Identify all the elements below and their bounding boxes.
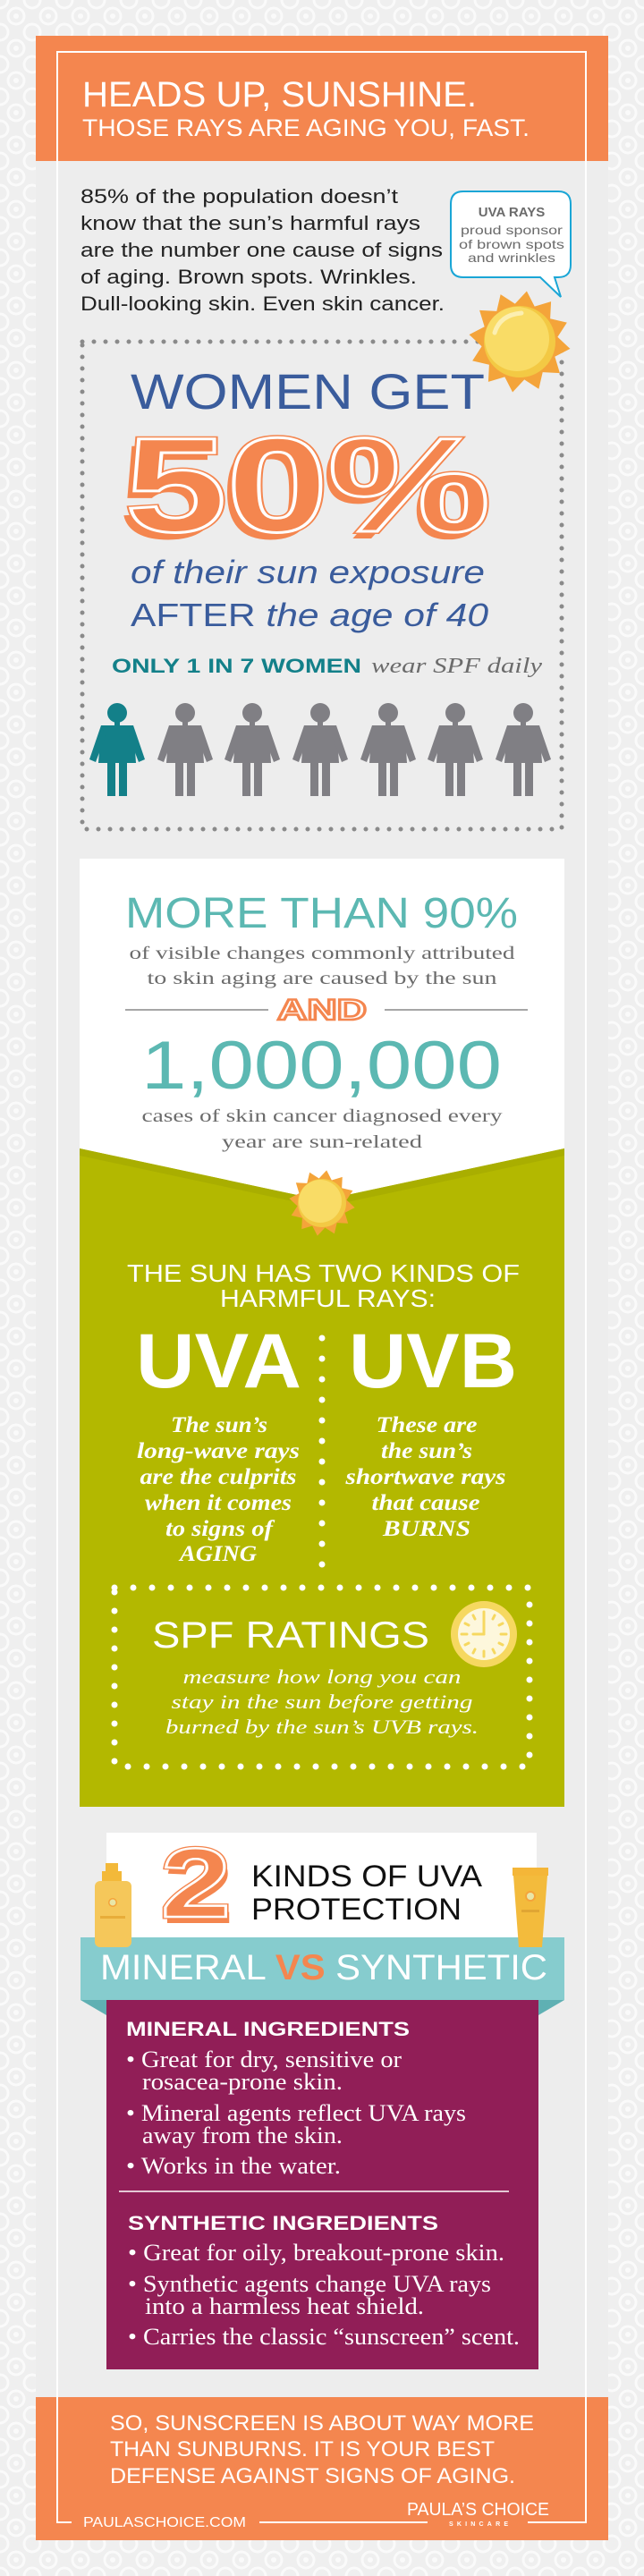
dotted divider <box>318 1338 326 1565</box>
teal ribbon: MINERAL VS SYNTHETIC <box>100 1948 547 1987</box>
icon row: women figures <box>89 703 551 796</box>
big number 50%: 50% <box>125 410 490 560</box>
mineral ingredients: rosacea-prone skin. <box>142 2069 343 2095</box>
callout: UVA rays bubble: proud sponsor <box>461 223 563 237</box>
synthetic ingredients: SYNTHETIC INGREDIENTS <box>128 2212 438 2234</box>
icon: sunscreen bottle <box>95 1863 131 1947</box>
intro text: Dull-looking skin. Even skin cancer. <box>80 292 445 315</box>
big number 2: 2 <box>161 1828 231 1938</box>
UVA column: are the culprits <box>140 1465 297 1489</box>
subtitle: THOSE RAYS ARE AGING YOU, FAST. <box>82 114 530 141</box>
mineral ingredients: MINERAL INGREDIENTS <box>126 2018 410 2040</box>
header banner <box>36 36 608 161</box>
panel: sun damage stats: HARMFUL RAYS: <box>220 1284 436 1312</box>
stat box: women 50%: AFTER the age of 40 <box>131 597 488 633</box>
icon: small sun <box>284 1165 360 1241</box>
intro text: know that the sun’s harmful rays <box>80 212 420 234</box>
panel: sun damage stats: year are sun-related <box>222 1132 422 1152</box>
teal ribbon <box>80 1937 564 2015</box>
text: skin cancer cases: cases of skin cancer diagnosed every <box>141 1106 503 1126</box>
text: sun exposure: of their sun exposure <box>131 554 485 590</box>
SPF ratings box: burned by the sun’s UVB rays. <box>165 1716 479 1738</box>
mineral ingredients <box>126 2018 466 2179</box>
big number 1,000,000: 1,000,000 <box>141 1028 502 1104</box>
stat box: women 50%: wear SPF daily <box>371 655 542 678</box>
heading: more than 90%: MORE THAN 90% <box>125 890 518 937</box>
UVA column <box>136 1318 301 1566</box>
synthetic ingredients: • Great for oily, breakout-prone skin. <box>128 2240 504 2266</box>
UVB column: BURNS <box>382 1517 470 1541</box>
mineral ingredients: • Great for dry, sensitive or <box>126 2046 402 2072</box>
logo: PAULA’S CHOICE <box>407 2500 549 2520</box>
text: only 1 in 7: ONLY 1 IN 7 WOMEN <box>112 655 361 677</box>
UVB column: These are <box>376 1413 478 1437</box>
SPF ratings box: measure how long you can <box>182 1665 462 1688</box>
UVB column: UVB <box>349 1318 517 1404</box>
UVA column: The sun’s <box>171 1413 267 1437</box>
mineral ingredients: away from the skin. <box>142 2123 343 2148</box>
AND divider: AND <box>277 994 367 1026</box>
icon: sun <box>462 284 577 399</box>
synthetic ingredients: • Synthetic agents change UVA rays <box>128 2271 491 2297</box>
callout: UVA rays bubble: of brown spots <box>459 237 564 251</box>
UVA column: AGING <box>178 1542 257 1566</box>
big number 50% <box>118 410 490 567</box>
big number 50%: 50% <box>118 417 485 567</box>
heading: kinds of UVA protection: KINDS OF UVA <box>251 1860 482 1894</box>
icon: sunscreen tube <box>513 1868 548 1947</box>
UVA column: UVA <box>136 1318 301 1404</box>
synthetic ingredients <box>128 2212 520 2350</box>
icon: clock <box>451 1601 517 1667</box>
intro text <box>80 185 445 315</box>
intro text: of aging. Brown spots. Wrinkles. <box>80 266 417 288</box>
SPF ratings box: stay in the sun before getting <box>172 1690 472 1713</box>
SPF ratings box: SPF RATINGS <box>152 1614 429 1656</box>
SPF ratings box <box>114 1588 530 1767</box>
heading: women get: WOMEN GET <box>131 363 485 419</box>
big number 50%: 50% <box>125 410 490 560</box>
intro text: are the number one cause of signs <box>80 239 443 261</box>
closing statement <box>110 2411 534 2488</box>
UVB column: the sun’s <box>381 1439 472 1463</box>
panel: sun damage stats: to skin aging are caused by the sun <box>147 969 497 988</box>
heading: two kinds of rays: THE SUN HAS TWO KINDS OF <box>127 1259 520 1287</box>
title: HEADS UP, SUNSHINE. <box>82 75 477 114</box>
UVA column: long-wave rays <box>137 1439 300 1463</box>
UVB column: shortwave rays <box>344 1465 506 1489</box>
mineral ingredients: • Mineral agents reflect UVA rays <box>126 2100 466 2126</box>
website: PAULASCHOICE.COM <box>83 2515 246 2530</box>
intro text: 85% of the population doesn’t <box>80 185 398 208</box>
big number 2: 2 <box>163 1835 234 1945</box>
logo <box>407 2500 549 2528</box>
big number 2: 2 <box>161 1828 231 1938</box>
callout: UVA rays bubble: UVA RAYS <box>479 205 545 220</box>
UVB column <box>344 1318 517 1541</box>
UVB column: that cause <box>372 1491 479 1515</box>
purple ingredients box <box>106 2000 538 2369</box>
closing statement: SO, SUNSCREEN IS ABOUT WAY MORE <box>110 2411 534 2436</box>
callout: UVA rays bubble <box>451 191 571 297</box>
UVA column: when it comes <box>145 1491 292 1515</box>
synthetic ingredients: • Carries the classic “sunscreen” scent. <box>128 2324 520 2350</box>
panel: UVA protection: PROTECTION <box>251 1893 462 1927</box>
callout: UVA rays bubble: and wrinkles <box>468 250 555 265</box>
panel: UVA protection <box>80 1828 564 2369</box>
panel: sun damage stats <box>80 859 564 1807</box>
footer <box>36 2397 608 2540</box>
stat box: women 50% <box>82 342 562 829</box>
mineral ingredients: • Works in the water. <box>126 2153 341 2179</box>
closing statement: THAN SUNBURNS. IT IS YOUR BEST <box>110 2437 495 2462</box>
UVA column: to signs of <box>165 1517 275 1541</box>
synthetic ingredients: into a harmless heat shield. <box>145 2293 424 2319</box>
text: visible changes: of visible changes commonly attributed <box>129 944 515 963</box>
logo: SKINCARE <box>449 2521 508 2528</box>
closing statement: DEFENSE AGAINST SIGNS OF AGING. <box>110 2464 515 2488</box>
